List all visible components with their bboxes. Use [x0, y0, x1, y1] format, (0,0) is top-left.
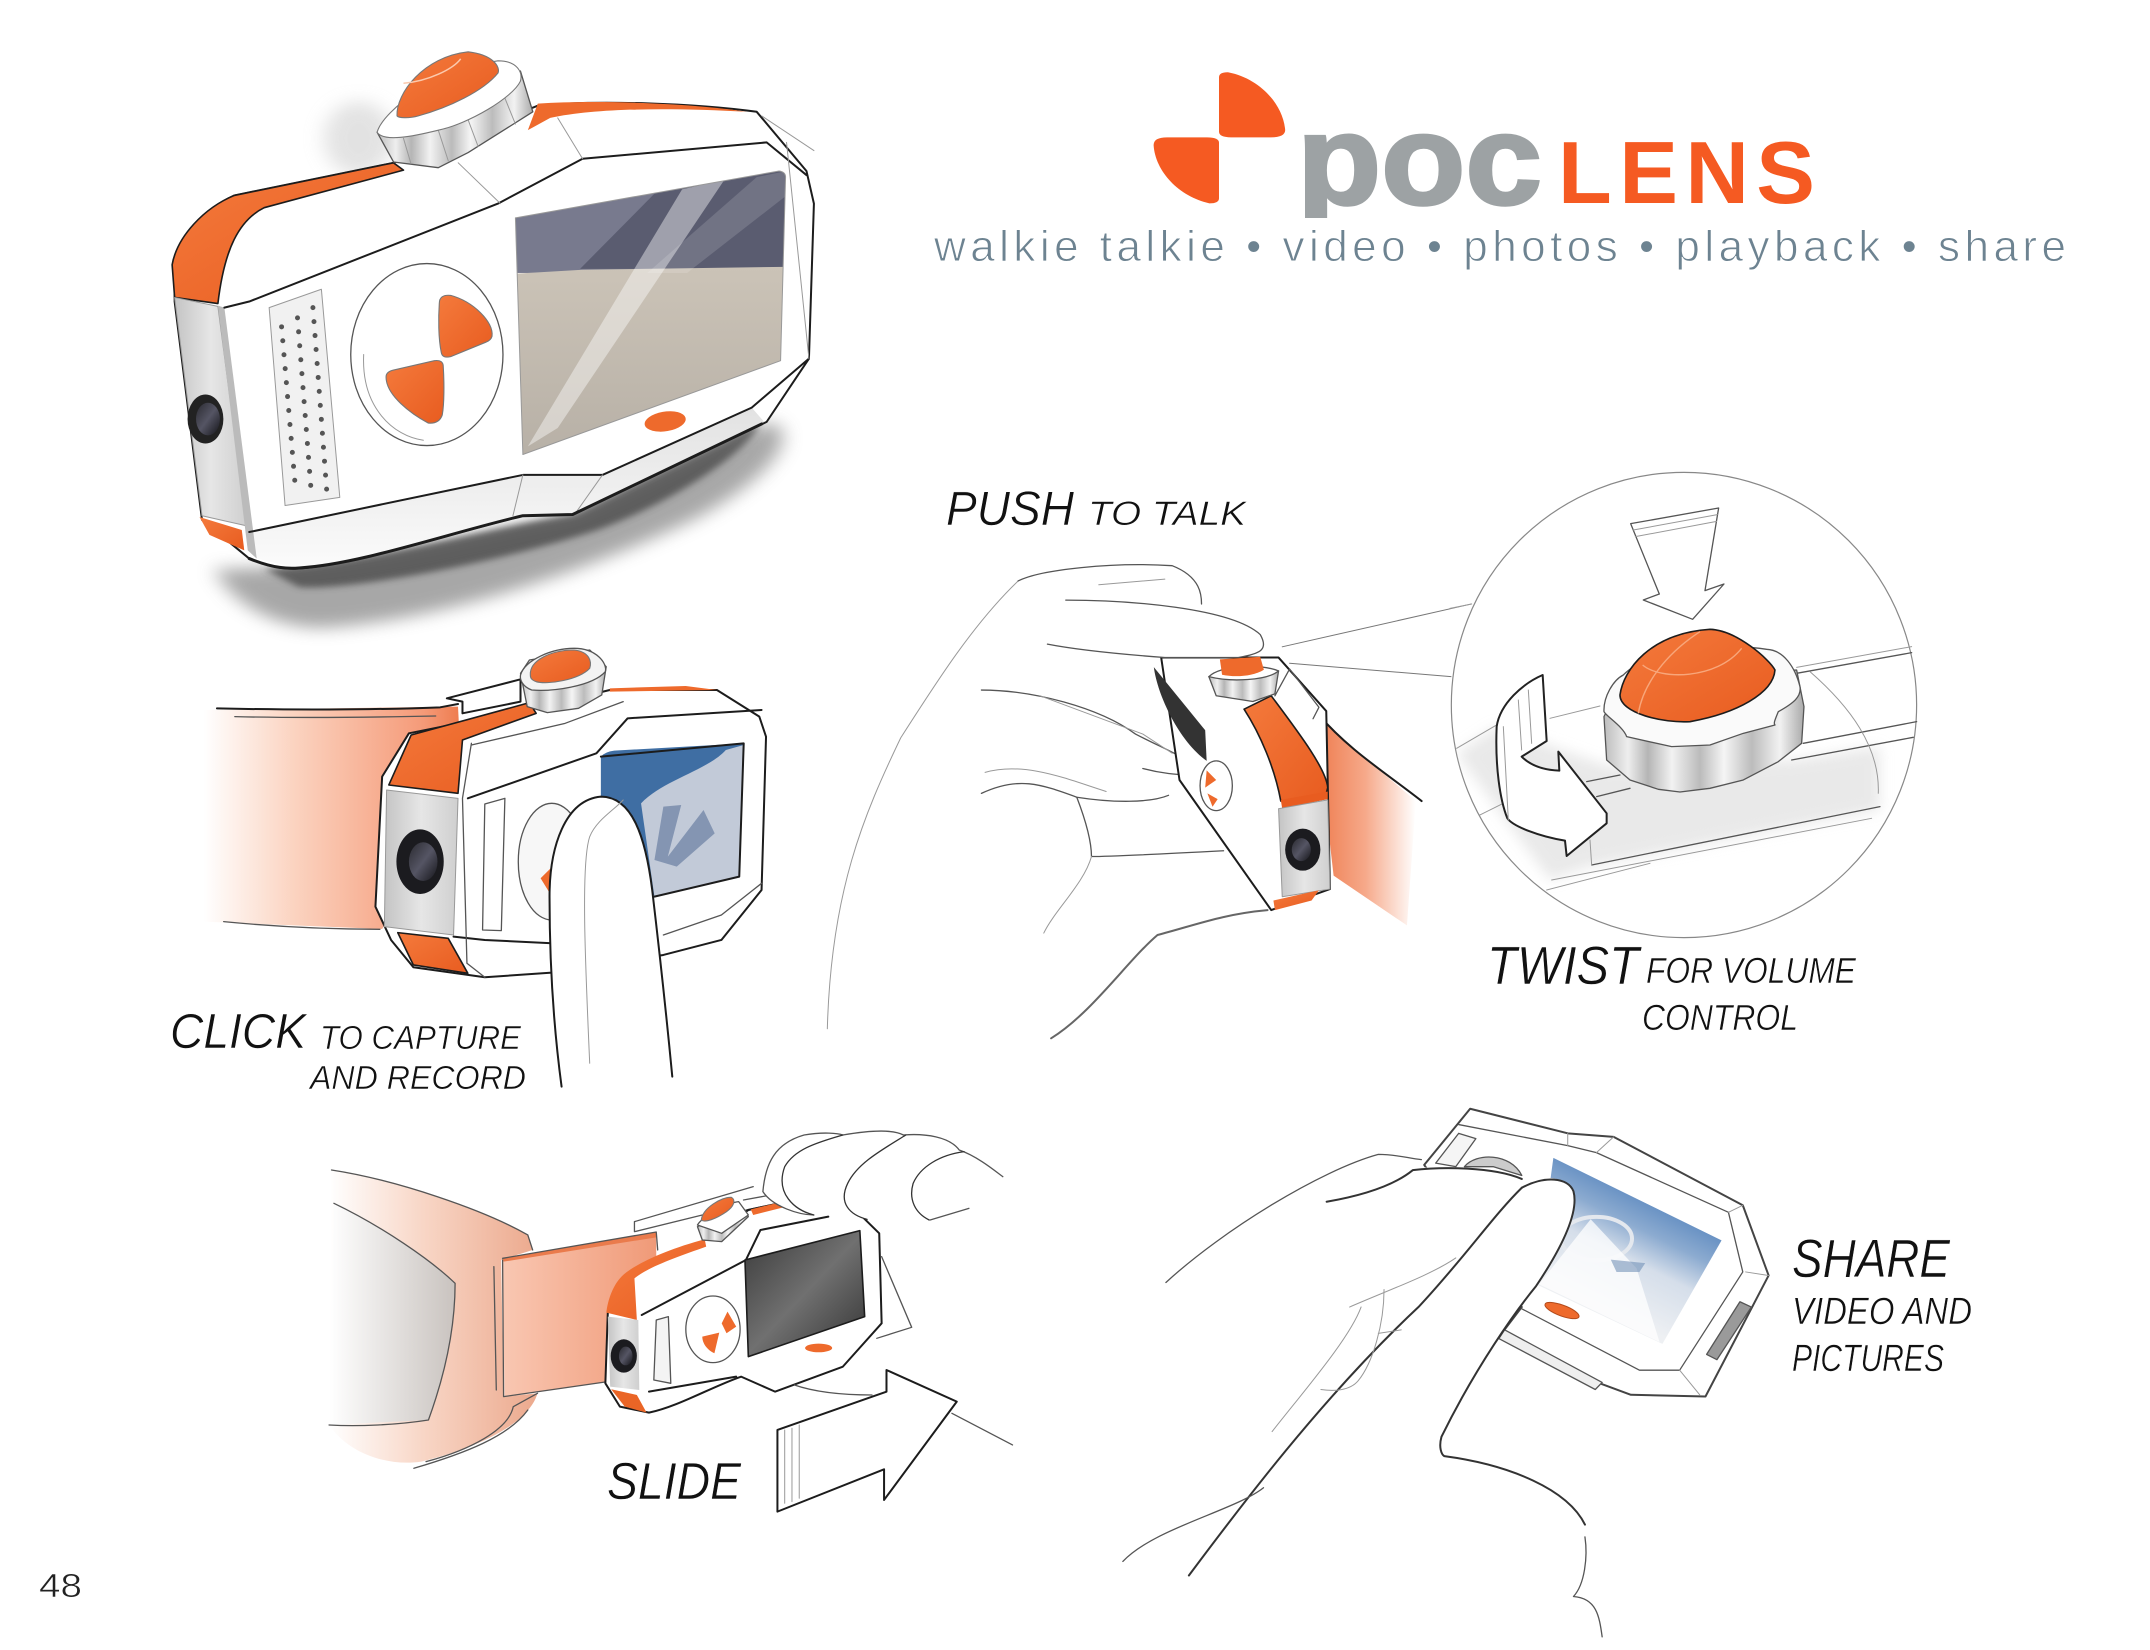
camera lens [1285, 829, 1320, 871]
knob top [1209, 657, 1279, 702]
grey end panel [175, 297, 247, 526]
knob [697, 1197, 748, 1242]
main device illustration [172, 52, 814, 628]
twist arrow [1496, 675, 1607, 856]
logo petals [1154, 72, 1285, 203]
caption: twist: FOR VOLUME [1646, 950, 1857, 991]
orange button lower [386, 361, 444, 423]
orange dome [1620, 629, 1775, 722]
knob [520, 648, 606, 713]
hand outline [827, 565, 1268, 1038]
caption: share: VIDEO AND [1792, 1291, 1972, 1333]
logo wordmark poc: poc [1297, 89, 1542, 232]
device body [172, 102, 814, 569]
device side view [1154, 658, 1330, 910]
dark screen [745, 1231, 865, 1357]
pressing finger [1047, 600, 1264, 658]
caption: share: PICTURES [1792, 1338, 1944, 1380]
oval capture button [642, 408, 688, 435]
slide scene [329, 1131, 1013, 1512]
caption: twist [1487, 936, 1857, 1038]
down arrow [1631, 508, 1724, 619]
side port [1707, 1302, 1751, 1360]
orange button upper [439, 295, 492, 357]
wrist strap click scene [204, 648, 766, 1087]
camera lens [188, 395, 223, 444]
strap [204, 704, 462, 929]
dial behind finger [518, 803, 585, 920]
knob ridged collar [1604, 647, 1804, 792]
device body [375, 686, 766, 977]
caption: click [170, 1005, 526, 1096]
control dial with two buttons [351, 264, 503, 446]
caption: push to talk [946, 483, 1248, 536]
camera lens [611, 1339, 637, 1373]
band lines [1450, 604, 1917, 890]
screen mountain photo [601, 743, 744, 897]
logo wordmark LENS: LENS [1558, 123, 1815, 222]
connector lines to detail circle [1282, 604, 1472, 677]
strap clip [447, 679, 521, 713]
share scene [1123, 1109, 1769, 1637]
circle outline [1451, 472, 1917, 938]
top knob [377, 52, 533, 168]
caption: push to talk: PUSH [946, 483, 1074, 536]
oval button [805, 1344, 832, 1352]
caption: slide: SLIDE [607, 1453, 742, 1511]
page number: 48 [39, 1567, 82, 1604]
caption: share: SHARE [1792, 1229, 1951, 1289]
caption: twist: CONTROL [1642, 997, 1798, 1038]
strap [1315, 715, 1422, 925]
slide arrow [777, 1257, 1013, 1512]
oval button [1541, 1299, 1583, 1322]
caption: twist: TWIST [1487, 936, 1643, 996]
caption: click: CLICK [170, 1005, 308, 1059]
screen photo of ski slope [508, 167, 792, 459]
device body [605, 1199, 882, 1413]
clip and rail lines [634, 1187, 794, 1232]
lower body band [249, 408, 764, 568]
dial and buttons [686, 1296, 740, 1363]
caption: share [1792, 1229, 1972, 1380]
tagline: walkie talkie • video • photos • playback • share [933, 222, 2066, 271]
speaker strip [483, 798, 505, 931]
caption: click: AND RECORD [308, 1059, 526, 1096]
device drop shadow [214, 102, 783, 628]
camera lens [396, 829, 444, 894]
orange top left corner [172, 163, 403, 304]
band shading [1457, 727, 1880, 880]
orange top right strip [528, 102, 747, 130]
screen photo [1536, 1158, 1722, 1344]
orange bottom corner [200, 517, 244, 550]
speaker grille [269, 289, 340, 506]
device body [1424, 1109, 1769, 1397]
hand and thumb [1123, 1154, 1602, 1637]
caption: click: TO CAPTURE [320, 1019, 522, 1056]
forearm [329, 1170, 538, 1468]
strap [503, 1232, 658, 1397]
fingers [763, 1131, 1003, 1220]
finger [550, 797, 672, 1087]
push to talk scene [827, 565, 1472, 1038]
detail circle: knob twist and push [1450, 472, 1917, 938]
caption: push to talk: TO TALK [1088, 495, 1248, 533]
